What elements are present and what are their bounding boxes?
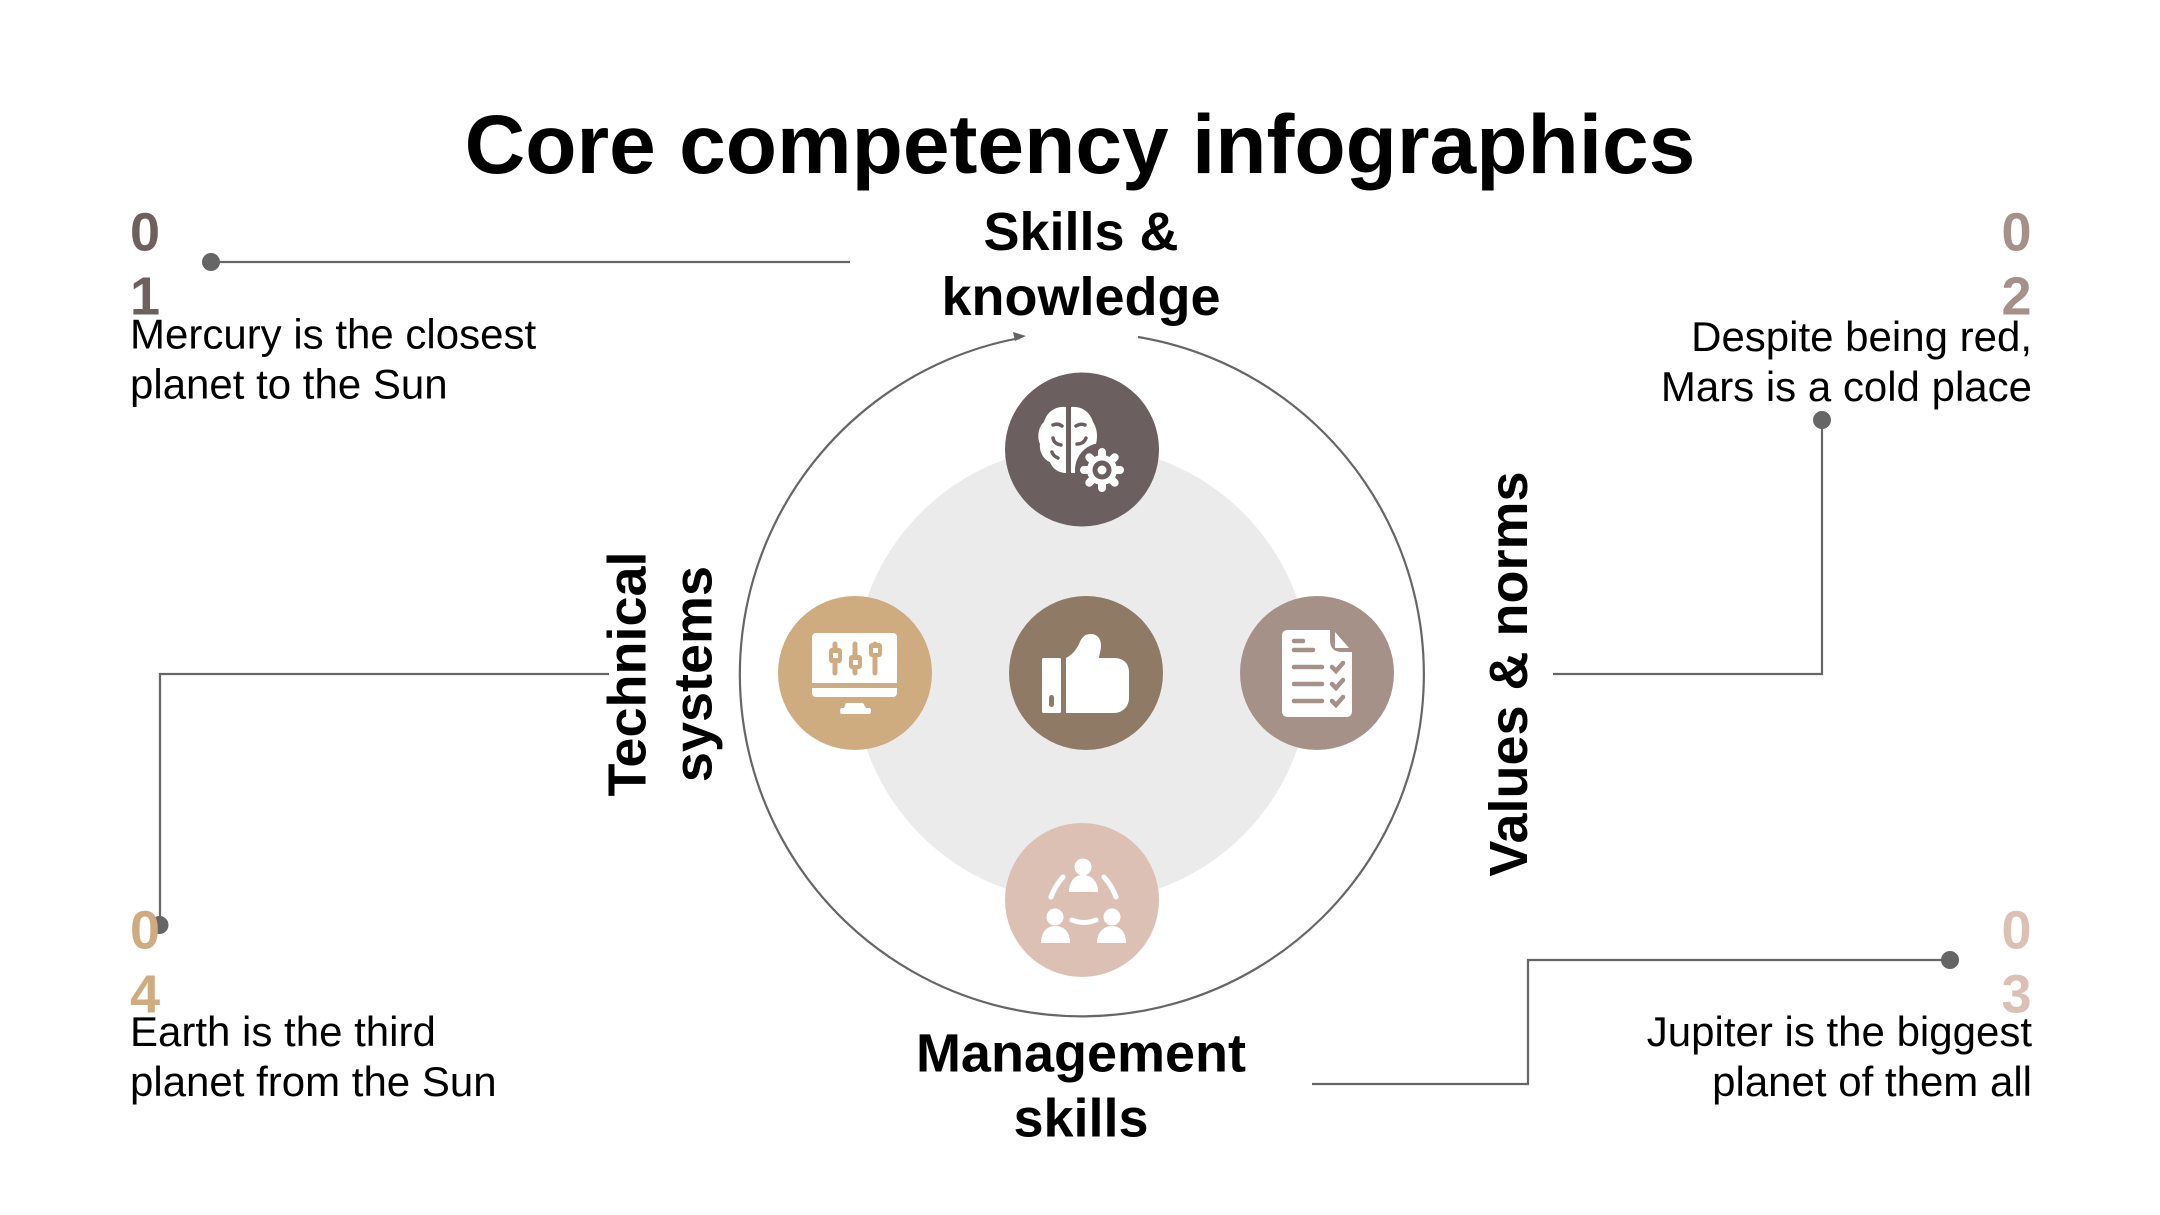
heading: technical systems: Technical: [598, 551, 658, 797]
icon: team of three people: [1005, 823, 1159, 977]
description 04: [130, 1008, 497, 1105]
number 02: [2001, 202, 2032, 326]
description 01: [130, 310, 536, 408]
connector 04: [150, 674, 609, 934]
item 01: [130, 202, 536, 408]
title: Core competency infographics: [465, 97, 1695, 191]
icon: brain and gear: [1005, 372, 1159, 526]
number 04: 4: [130, 964, 160, 1024]
heading: technical systems: systems: [664, 566, 724, 782]
item 03: [1647, 900, 2032, 1105]
number 01: [130, 202, 160, 326]
description 03: planet of them all: [1712, 1058, 2032, 1105]
icon: checklist document: [1240, 596, 1394, 750]
description 02: Despite being red,: [1691, 313, 2032, 360]
description 03: Jupiter is the biggest: [1647, 1008, 2032, 1055]
icon: thumbs up: [1009, 596, 1163, 750]
connector 02: [1553, 411, 1831, 674]
description 02: Mars is a cold place: [1661, 363, 2032, 410]
description 04: planet from the Sun: [130, 1058, 497, 1105]
heading: skills and knowledge: Skills &: [983, 202, 1179, 262]
number 03: [2001, 900, 2032, 1024]
number 04: 0: [130, 900, 160, 960]
number 04: [130, 900, 160, 1024]
connector 03: [1312, 951, 1959, 1084]
connector 01: [202, 253, 850, 271]
description 01: Mercury is the closest: [130, 310, 536, 358]
heading: skills and knowledge: knowledge: [941, 267, 1221, 327]
heading: management skills: [916, 1024, 1246, 1148]
number 03: 3: [2001, 964, 2032, 1024]
number 02: 2: [2001, 266, 2032, 326]
heading: values and norms: Values & norms: [1479, 471, 1539, 877]
item 02: [1661, 202, 2032, 410]
item 04: [130, 900, 497, 1105]
heading: technical systems: [598, 551, 724, 797]
outer ring with arrow: [740, 332, 1424, 1016]
heading: skills and knowledge: [941, 202, 1221, 327]
description 04: Earth is the third: [130, 1008, 436, 1055]
number 03: 0: [2001, 900, 2032, 960]
description 03: [1647, 1008, 2032, 1105]
central light grey circle: [854, 446, 1310, 902]
heading: management skills: skills: [1013, 1088, 1149, 1148]
description 01: planet to the Sun: [130, 360, 448, 408]
number 01: 1: [130, 266, 160, 326]
number 02: 0: [2001, 202, 2032, 262]
icon: monitor with sliders: [778, 596, 932, 750]
description 02: [1661, 313, 2032, 410]
number 01: 0: [130, 202, 160, 262]
heading: management skills: Management: [916, 1024, 1246, 1084]
